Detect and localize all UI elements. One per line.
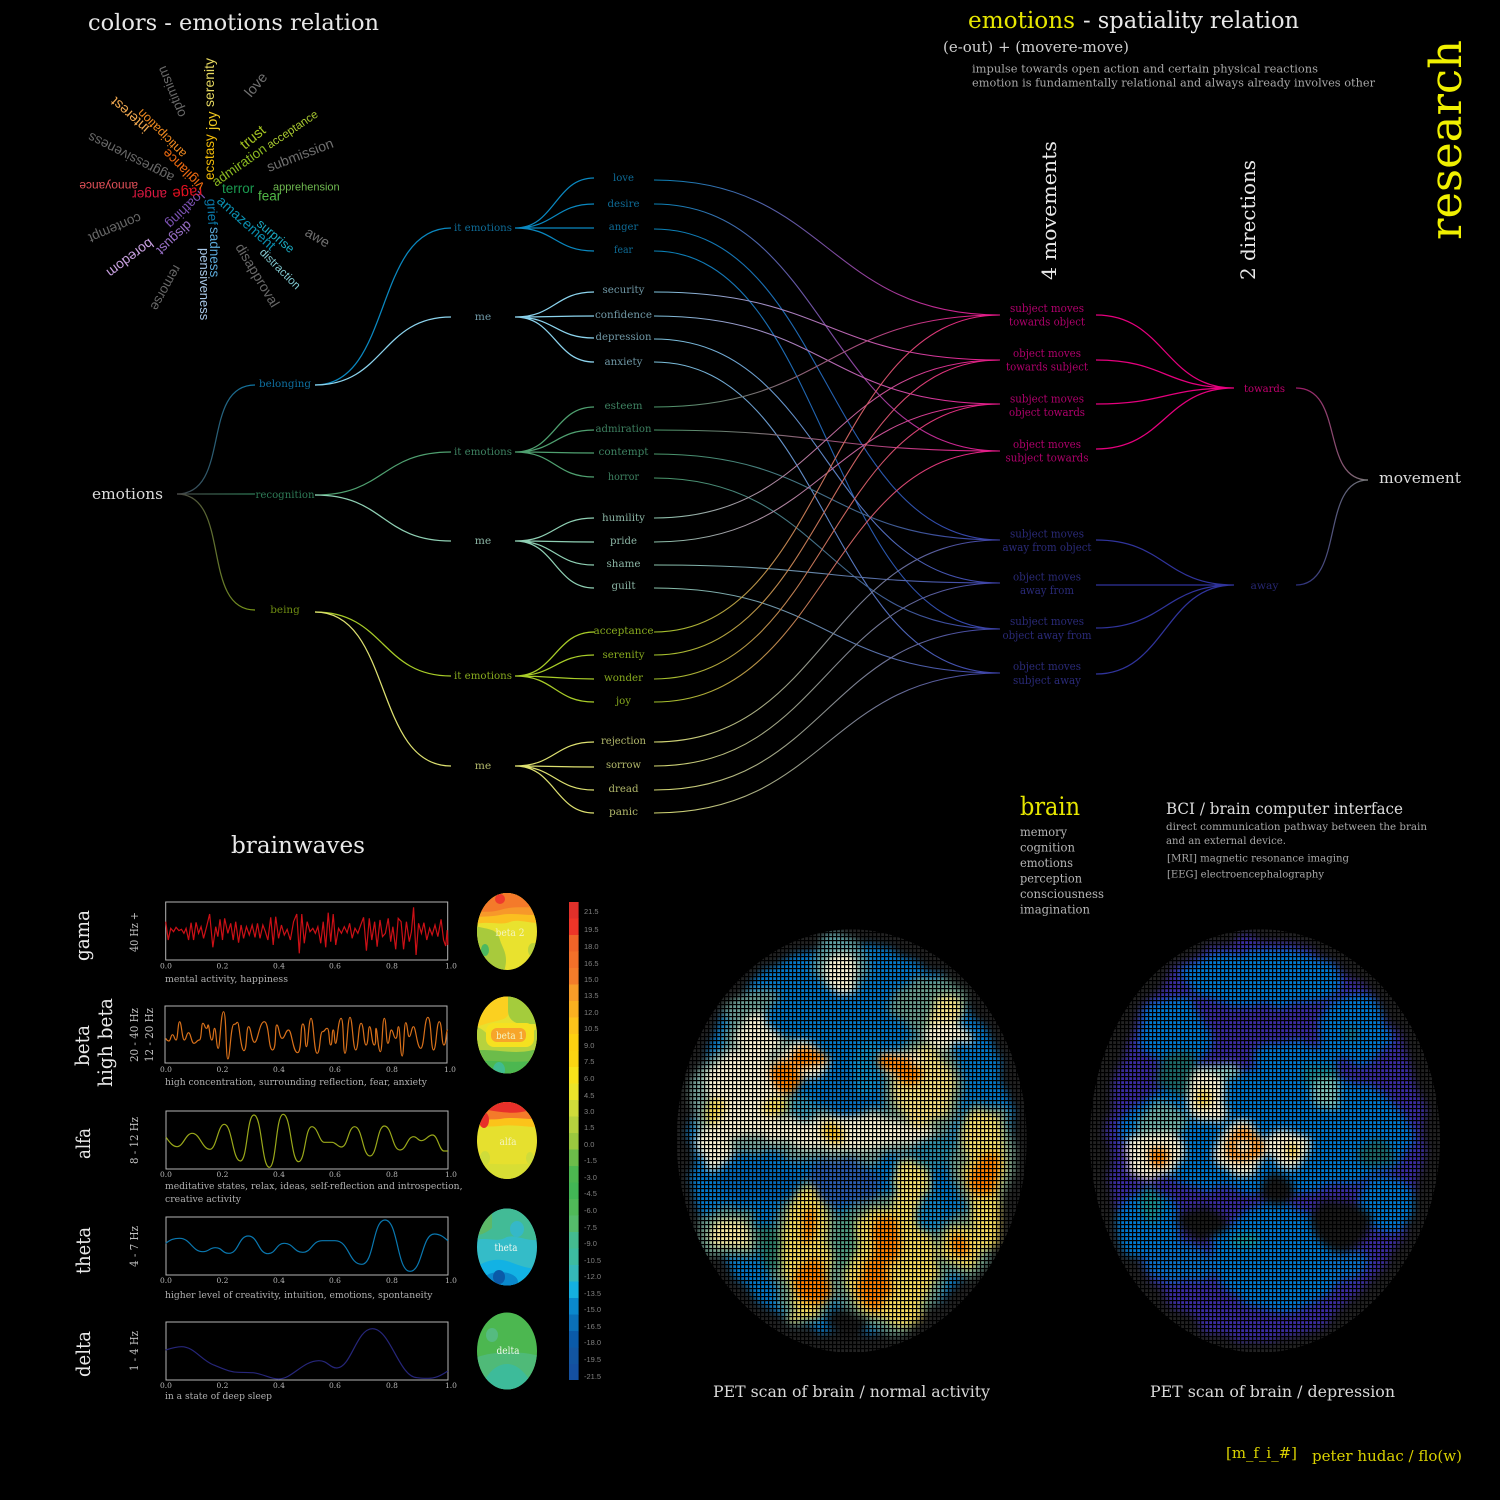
tree level 3 labels: serenity [602,649,645,661]
tree level 3 labels: pride [610,535,637,547]
BCI description: [MRI] magnetic resonance imaging [1167,852,1349,864]
EEG head map: delta: delta [496,1346,520,1357]
tree level 2 labels: me [475,760,491,772]
heading: emotions - spatiality relation [968,8,1299,34]
word wheel: emotions by color: interest [107,94,152,137]
axis tick labels: 0.6 [329,1381,341,1390]
tree level 2 labels: it emotions [454,222,512,234]
heading: brain: brain [1020,792,1080,821]
axis tick labels: 0.8 [386,1276,398,1285]
rotated band names: delta [71,1331,95,1377]
credit: author: peter hudac / flo(w) [1312,1447,1462,1465]
wave captions: in a state of deep sleep [165,1391,272,1402]
root label: movement: movement [1379,469,1461,487]
word wheel: emotions by color: vigilance [159,146,207,193]
tree level 2 labels: it emotions [454,446,512,458]
word wheel: emotions by color: apprehension [273,182,340,194]
word wheel: emotions by color: grief [204,198,220,226]
color scale numbers: -3.0 [584,1173,597,1182]
tree level 3 labels: admiration [596,423,652,435]
word wheel: emotions by color: pensiveness [197,248,212,321]
axis tick labels: 0.8 [386,1381,398,1390]
color scale numbers: -6.0 [584,1206,597,1215]
word wheel: emotions by color: trust [237,123,269,153]
heading: emotions - spatiality relation: - spatiality relation [1083,8,1299,34]
axis tick labels: 0.2 [217,962,229,970]
color scale numbers: 12.0 [584,1008,599,1017]
description text: impulse towards open action and certain physical reactions [972,62,1318,76]
movement labels: towards group: subject moves [1010,302,1084,315]
axis tick labels: 0.4 [273,1170,285,1179]
tree connectors: emotions to categories [177,178,594,813]
PET caption: depression: PET scan of brain / depression [1150,1382,1395,1401]
word wheel: emotions by color: loathing [163,188,207,231]
axis tick labels: 0.6 [329,1276,341,1285]
word wheel: emotions by color: aggressiveness [85,129,176,186]
tree level 3 labels: fear [614,244,634,256]
color scale numbers: 18.0 [584,942,599,951]
axis tick labels [160,962,457,1390]
PET scan: normal activity [677,930,1026,1352]
color scale numbers: 13.5 [584,991,599,1000]
tree level 3 labels: rejection [601,735,646,747]
axis tick labels: 0.0 [160,1381,172,1390]
color scale numbers: -15.0 [584,1305,601,1314]
movement labels: towards group: towards object [1009,316,1086,328]
axis tick labels: 0.6 [329,1065,341,1074]
movement labels: away group: subject moves [1010,528,1084,540]
color scale numbers: 19.5 [584,925,599,934]
tree level 3 labels: depression [596,331,652,343]
tree level 1 labels: recognition [256,489,315,501]
word wheel: emotions by color: admiration [209,141,269,189]
rotated frequency labels: 12 - 20 Hz [142,1008,156,1062]
color scale numbers: -18.0 [584,1338,601,1347]
description text: emotion is fundamentally relational and always already involves other [972,76,1376,90]
color scale numbers: -21.5 [584,1372,601,1381]
tree level 3 labels: panic [609,806,638,818]
axis tick labels: 0.2 [217,1065,229,1074]
movement labels: away group: object away from [1002,629,1092,642]
movement labels: towards group: subject moves [1010,392,1084,406]
movement labels: away group: away from [1020,584,1075,597]
credit: project tag: [m_f_i_#] [1226,1444,1297,1462]
rotated band names: high beta [93,998,117,1087]
heading: colors - emotions relation: colors - emotions relation [88,11,379,36]
color scale numbers: 6.0 [584,1074,594,1083]
color scale numbers: 15.0 [584,975,599,984]
axis tick labels: 0.2 [217,1381,229,1390]
direction label: away: away [1250,580,1279,592]
word wheel: emotions by color: distraction [257,247,302,292]
title: research: research [1421,40,1472,240]
axis tick labels: 0.0 [160,1170,172,1179]
tree level 3 labels: security [602,284,645,296]
tree level 3 labels: wonder [604,672,644,684]
wave captions [165,974,462,1402]
color scale numbers: -9.0 [584,1239,597,1248]
word wheel: emotions by color: anticipation [134,106,189,161]
color scale numbers: -7.5 [584,1223,597,1232]
axis tick labels: 0.4 [273,1381,285,1390]
word wheel: emotions by color: surprise [254,217,297,256]
movement labels: towards group: object moves [1013,438,1081,451]
tree level 3 labels: shame [606,558,640,570]
heading: emotions - spatiality relation: emotions [968,8,1075,34]
color scale numbers: -19.5 [584,1355,601,1364]
tree level 3 labels [594,172,654,818]
PET scan: depression [1090,930,1440,1352]
color scale numbers: 10.5 [584,1024,599,1033]
axis tick labels: 0.4 [273,962,285,970]
tree level 3 labels: guilt [612,580,636,592]
BCI description [1166,821,1427,880]
word wheel: emotions by color: amazement [214,192,279,253]
rotated band names [70,910,117,1377]
color scale numbers: 3.0 [584,1107,594,1116]
brain functions list: emotions [1020,856,1073,870]
axis tick labels: 0.8 [386,1170,398,1179]
axis tick labels: 0.2 [217,1170,229,1179]
rotated band names: beta [70,1025,94,1066]
chart: theta wave [166,1217,448,1275]
rotated frequency labels [127,912,156,1371]
color scale numbers: 0.0 [584,1140,594,1149]
axis tick labels: 0.2 [217,1276,229,1285]
axis tick labels: 0.8 [386,1065,398,1074]
tree level 2 labels [454,222,512,772]
word wheel: emotions by color: remorse [147,263,184,313]
EEG head map: beta 1 [477,996,537,1074]
movement labels: away group: subject moves [1010,615,1084,628]
tree level 3 labels: anger [609,221,639,233]
word wheel: emotions by color: love [242,70,271,101]
EEG head map: beta 2: beta 2 [496,928,524,939]
wave captions: high concentration, surrounding reflection, fear, anxiety [165,1077,428,1088]
word wheel: emotions by color: submission [264,135,335,175]
rotated band names: alfa [71,1128,95,1159]
word wheel: emotions by color: acceptance [265,109,320,151]
tree level 3 labels: sorrow [606,759,641,771]
rotated frequency labels: 8 - 12 Hz [127,1117,141,1164]
rotated frequency labels: 20 - 40 Hz [127,1008,141,1062]
axis tick labels: 1.0 [445,962,457,970]
movement labels: away group [1002,528,1092,687]
tree level 3 labels: joy [614,695,631,707]
direction label: towards: towards [1244,383,1285,395]
word wheel: emotions by color: joy [205,111,221,131]
column heading: 4 movements: 4 movements [1037,141,1061,280]
EEG head map: alfa: alfa [500,1137,517,1148]
word wheel: emotions by color: terror [222,181,255,196]
EEG head map: theta [477,1208,537,1286]
color scale numbers: 16.5 [584,959,599,968]
axis tick labels: 0.8 [386,962,398,970]
tree level 1 labels: belonging [259,378,311,390]
color scale numbers: -16.5 [584,1322,601,1331]
word wheel: emotions by color: rage [172,183,203,202]
heading: brainwaves: brainwaves [231,833,365,859]
EEG head map: beta 2 [477,893,537,970]
word wheel: emotions by color: contempt [86,210,144,246]
tree root label: emotions: emotions [92,485,163,503]
color scale numbers: 4.5 [584,1091,594,1100]
movement labels: towards group: object moves [1013,347,1081,360]
brain functions list: memory [1020,825,1067,839]
movement labels: towards group: object towards [1009,406,1085,419]
word wheel: emotions by color: serenity [201,58,217,107]
axis tick labels: 0.6 [329,1170,341,1179]
color scale numbers: -4.5 [584,1189,597,1198]
tree level 3 labels: confidence [595,309,652,321]
word wheel: emotions by color: ecstasy [202,134,217,180]
movement labels: towards group: towards subject [1006,360,1089,374]
wave captions: meditative states, relax, ideas, self-reflection and introspection, [165,1181,462,1192]
column heading: 2 directions: 2 directions [1236,160,1260,280]
movement labels: away group: subject away [1013,674,1082,687]
word wheel: emotions by color: sadness [207,227,222,278]
axis tick labels: 0.0 [160,1276,172,1285]
color scale numbers [584,907,601,1381]
chart: beta wave [165,1006,448,1063]
brain functions list: cognition [1020,840,1075,854]
heading: BCI: BCI / brain computer interface [1166,799,1403,818]
color scale numbers: 21.5 [584,907,599,916]
rotated band names: theta [71,1227,95,1274]
brain functions list [1020,825,1104,916]
wave captions: creative activity [165,1194,242,1205]
brain functions list: consciousness [1020,887,1104,901]
tree level 1 labels: being [270,604,300,616]
tree level 3 labels: anxiety [604,356,643,368]
word wheel: emotions by color: awe [302,224,333,251]
word wheel: emotions by color: annoyance [79,179,138,193]
axis tick labels: 1.0 [445,1276,457,1285]
description text [972,62,1376,90]
movement labels: away group: away from object [1002,541,1092,554]
tree level 2 labels: me [475,535,491,547]
crossing connectors: emotions to movements [654,180,1000,813]
axis tick labels: 0.0 [160,962,172,970]
wave captions: mental activity, happiness [165,974,288,985]
EEG head map: alfa [477,1102,537,1179]
color scale numbers: 7.5 [584,1057,594,1066]
brain functions list: perception [1020,872,1082,886]
color scale numbers: 1.5 [584,1123,594,1132]
axis tick labels: 0.6 [329,962,341,970]
chart: gamma wave [166,902,448,960]
movement labels: away group: object moves [1013,660,1081,673]
BCI description: [EEG] electroencephalography [1167,868,1324,880]
tree level 3 labels: esteem [604,400,643,412]
chart: alpha wave [166,1111,448,1169]
BCI description: and an external device. [1166,835,1286,847]
movement labels: towards group [1006,302,1089,464]
color scale numbers: -1.5 [584,1156,597,1165]
word wheel: emotions by color: disgust [153,218,195,258]
axis tick labels: 1.0 [445,1381,457,1390]
movement labels: towards group: subject towards [1006,452,1089,464]
tree level 3 labels: contempt [598,446,649,458]
color scale numbers: -10.5 [584,1256,601,1265]
color scale numbers: -13.5 [584,1289,601,1298]
tree level 3 labels: horror [608,471,640,483]
tree level 3 labels: love [613,172,634,184]
word wheel: emotions by color: disapproval [232,240,283,310]
word wheel: emotions by color: optimism [154,64,189,120]
rotated frequency labels: 4 - 7 Hz [127,1226,141,1267]
PET caption: normal activity: PET scan of brain / normal activity [713,1382,990,1401]
EEG head map: beta 1: beta 1 [496,1031,524,1042]
tree level 3 labels: acceptance [594,625,654,637]
rotated frequency labels: 40 Hz + [127,912,141,952]
tree level 3 labels: humility [602,512,645,524]
brain functions list: imagination [1020,902,1090,916]
tree level 2 labels: it emotions [454,670,512,682]
color scale numbers: -12.0 [584,1272,601,1281]
axis tick labels: 0.4 [273,1276,285,1285]
color scale bar [569,902,579,1380]
connectors: movements to directions [1096,315,1368,674]
axis tick labels: 1.0 [445,1170,457,1179]
EEG head map: theta: theta [494,1243,518,1254]
etymology line: (e-out) + (movere-move) [943,38,1129,56]
axis tick labels: 0.0 [160,1065,172,1074]
tree level 3 labels: desire [608,198,640,210]
BCI description: direct communication pathway between the brain [1166,821,1427,833]
EEG head map: delta [477,1312,537,1390]
wave captions: higher level of creativity, intuition, emotions, spontaneity [165,1290,433,1301]
word wheel: emotions by color: fear [258,189,282,204]
chart: delta wave [166,1322,448,1380]
rotated frequency labels: 1 - 4 Hz [127,1331,141,1371]
tree level 2 labels: me [475,311,491,323]
axis tick labels: 1.0 [444,1065,456,1074]
word wheel: emotions by color: anger [132,187,167,202]
axis tick labels: 0.4 [273,1065,285,1074]
word wheel: emotions by color: boredom [104,236,156,280]
tree level 1 labels [256,378,315,616]
word wheel: emotions by color [79,58,340,321]
movement labels: away group: object moves [1013,570,1081,584]
color scale numbers: 9.0 [584,1041,594,1050]
rotated band names: gama [70,910,94,961]
tree level 3 labels: dread [608,783,639,795]
